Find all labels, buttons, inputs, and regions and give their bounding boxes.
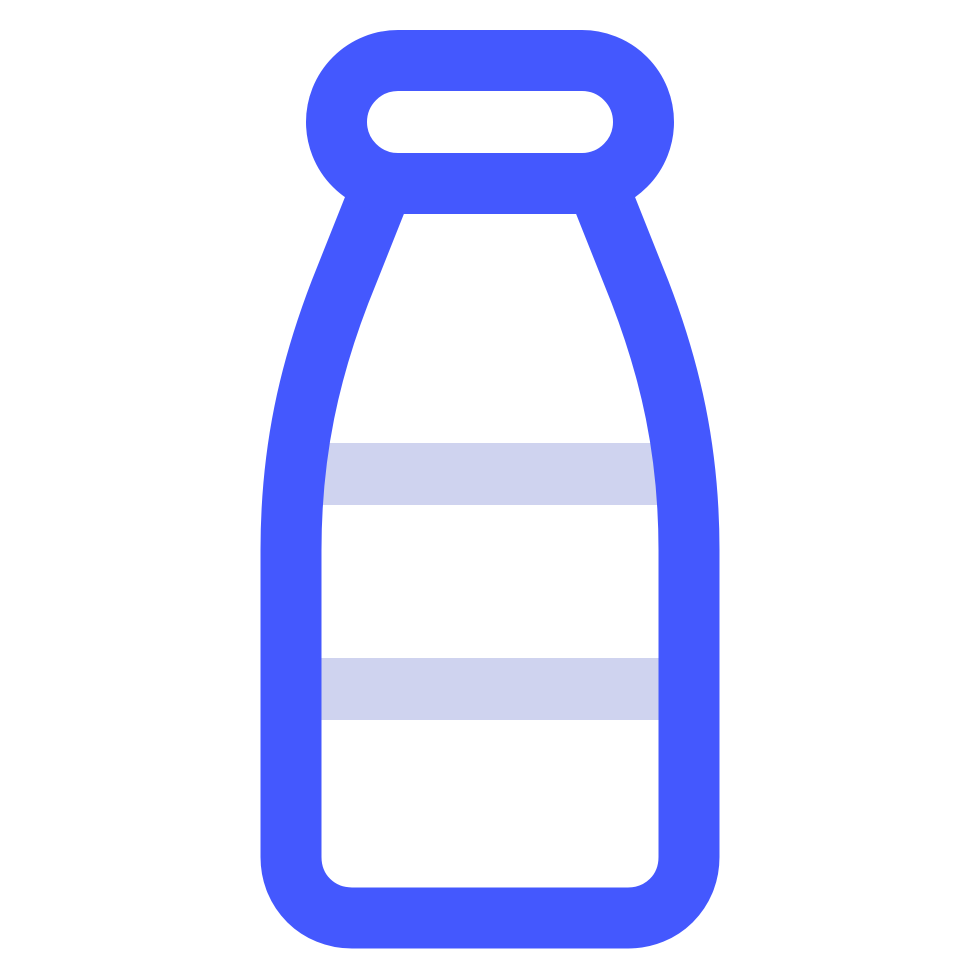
label band: upper xyxy=(322,443,658,505)
label band: lower xyxy=(320,658,660,720)
bottle body outline xyxy=(291,184,689,918)
bottle cap outline xyxy=(336,60,644,184)
